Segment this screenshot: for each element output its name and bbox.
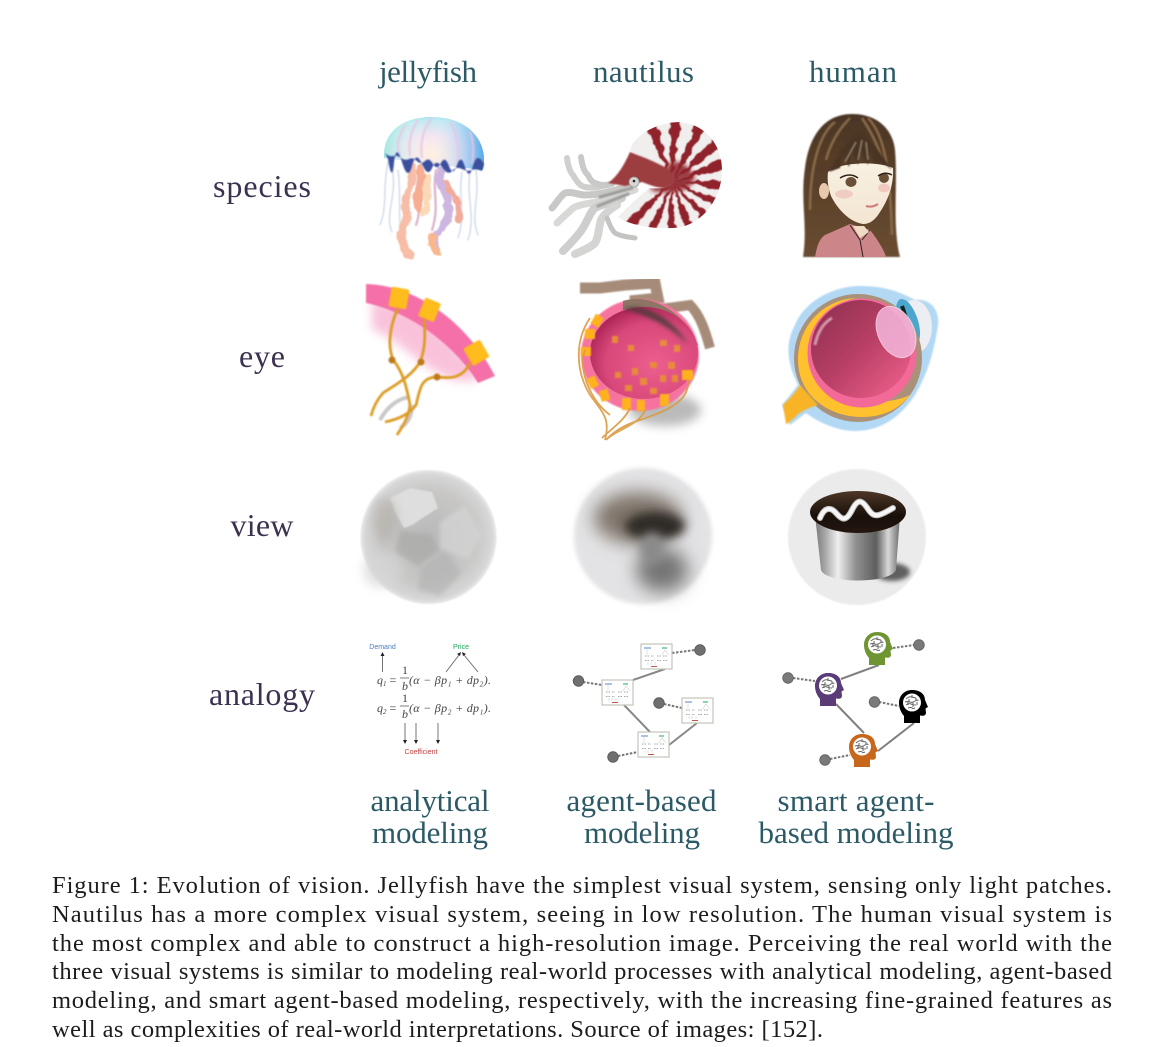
analogy: smart agent-based modeling network	[783, 632, 928, 767]
label: Coefficient: Coefficient	[405, 749, 438, 756]
illustration: human view, cake	[788, 469, 926, 605]
illustration: nautilus view	[574, 468, 712, 604]
column heading: jellyfish: jellyfish	[378, 54, 478, 89]
illustration: jellyfish view	[360, 470, 496, 604]
column footer: smart agent-based modeling	[758, 783, 954, 850]
illustration: human portrait	[803, 114, 900, 257]
row label: species: species	[213, 168, 311, 204]
figure caption: Nautilus has a more complex visual system, seeing in low resolution. The human visual system is	[52, 901, 1112, 928]
denominator two: b	[402, 707, 408, 721]
figure caption	[52, 872, 1112, 1043]
agent 2	[602, 680, 633, 705]
equation one: =	[386, 673, 396, 687]
nodes	[783, 640, 924, 765]
head: black	[899, 690, 928, 723]
agent 4	[638, 732, 669, 757]
fraction one: 1	[402, 663, 408, 677]
equation two: =	[386, 701, 396, 715]
illustration: jellyfish	[380, 117, 484, 255]
figure caption: well as complexities of real-world interpretations. Source of images: [152].	[52, 1016, 823, 1043]
agent 3	[682, 698, 713, 723]
agent 1	[641, 644, 672, 669]
head: orange	[849, 734, 878, 767]
column footer: agent-based modeling: agent-based	[566, 783, 717, 818]
figure caption: Figure 1: Evolution of vision. Jellyfish have the simplest visual system, sensing only light patches.	[52, 872, 1112, 899]
column heading: human: human	[809, 54, 898, 89]
illustration: jellyfish eye	[366, 284, 495, 435]
column heading: nautilus: nautilus	[593, 54, 694, 89]
column footer: agent-based modeling	[566, 783, 717, 850]
column footer: analytical modeling: modeling	[372, 815, 488, 850]
label: Price: Price	[453, 644, 469, 651]
label: Demand: Demand	[369, 644, 396, 651]
column footer: smart agent-based modeling: based modeling	[758, 815, 954, 850]
equation one right side: (α − βp₁ + dp₂).	[409, 673, 491, 687]
analogy: agent-based modeling network	[573, 644, 713, 762]
equation two: q	[377, 701, 383, 715]
row label: view: view	[230, 507, 294, 543]
fraction two: 1	[402, 691, 408, 705]
nodes	[573, 645, 705, 762]
illustration: human eye	[782, 286, 938, 431]
equation two right side: (α − βp₂ + dp₁).	[409, 701, 491, 715]
figure caption: three visual systems is similar to modeling real-world processes with analytical modeling, agent-based	[52, 958, 1112, 985]
column footer: analytical modeling	[370, 783, 490, 850]
analogy: analytical modeling equations	[369, 644, 491, 756]
column footer: smart agent-based modeling: smart agent-	[778, 783, 934, 818]
illustration: nautilus eye	[579, 283, 710, 440]
denominator one: b	[402, 679, 408, 693]
figure caption: the most complex and able to construct a high-resolution image. Perceiving the real world with the	[52, 930, 1112, 957]
equation two: 2	[383, 708, 387, 716]
equation one: q	[377, 673, 383, 687]
row label: eye: eye	[239, 338, 285, 374]
head: purple	[815, 673, 844, 706]
illustration: nautilus	[548, 122, 722, 258]
column footer: analytical modeling: analytical	[370, 783, 490, 818]
column footer: agent-based modeling: modeling	[584, 815, 700, 850]
head: green	[864, 632, 893, 665]
arrows	[380, 652, 478, 744]
row label: analogy: analogy	[209, 676, 315, 712]
figure caption: modeling, and smart agent-based modeling, respectively, with the increasing fine-grained features as	[52, 987, 1112, 1014]
equation one: 1	[383, 680, 386, 688]
